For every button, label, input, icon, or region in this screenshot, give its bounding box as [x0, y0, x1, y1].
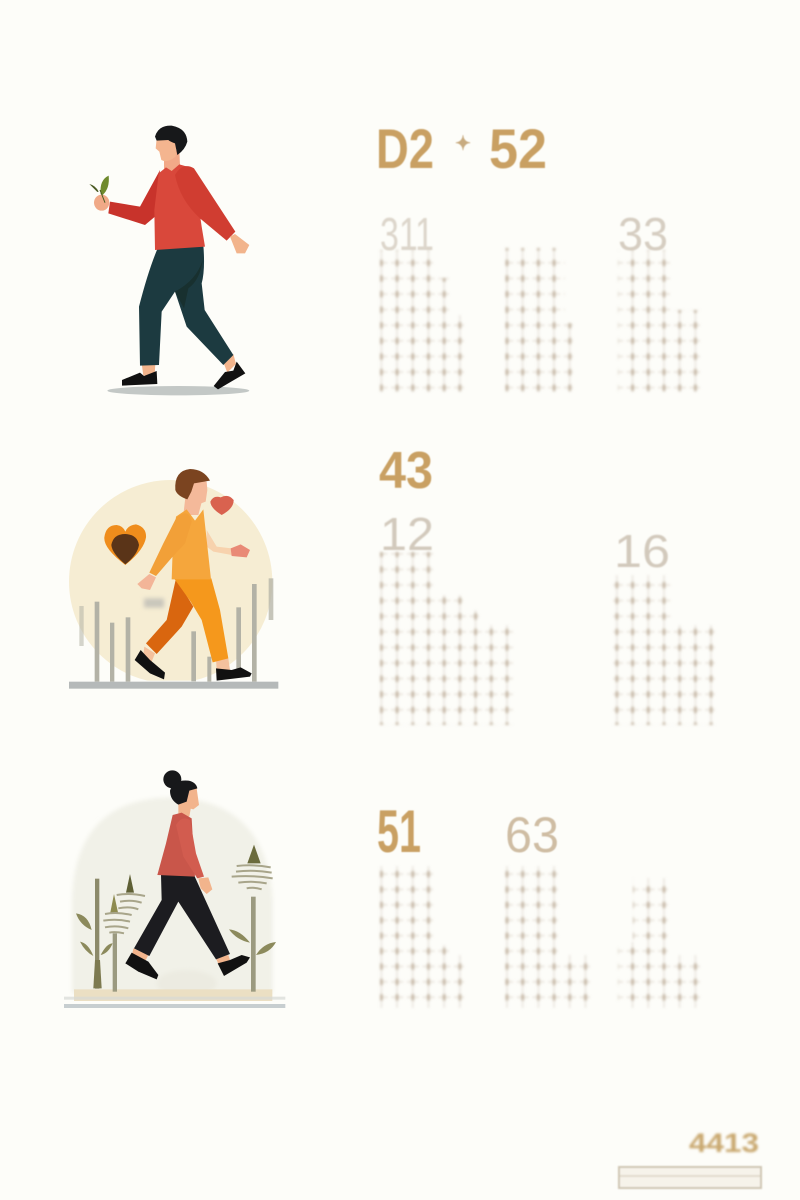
front arm: [175, 166, 235, 241]
near hand: [137, 574, 156, 590]
heading: D2 and 52: [376, 117, 547, 180]
sweater: [157, 813, 195, 877]
grid block one: [380, 250, 464, 392]
value D2: D2: [376, 117, 434, 180]
sleeve: [176, 818, 204, 878]
label: 311: 311: [380, 208, 434, 260]
left shoe: [125, 953, 158, 979]
near arm: [149, 513, 192, 576]
panel: top row grids: [380, 248, 700, 392]
icon: orange and brown heart: [104, 524, 146, 565]
back leg: [146, 578, 193, 654]
trouser shadow: [175, 260, 203, 308]
ankles: [142, 354, 236, 376]
fence posts: [79, 578, 273, 682]
ground line: [64, 1004, 285, 1008]
back arm: [108, 170, 160, 225]
right shoe: [218, 955, 250, 976]
sweater torso: [154, 164, 205, 250]
value 52: 52: [489, 117, 547, 180]
right hand: [230, 234, 249, 253]
grid block three: [618, 250, 700, 392]
hair bun: [163, 770, 181, 788]
far hand: [231, 544, 250, 557]
ground line upper: [64, 997, 285, 1000]
heading: 43: 43: [379, 442, 433, 500]
label: 33: 33: [618, 208, 668, 260]
hair: [155, 126, 187, 155]
ankles: [143, 647, 230, 671]
panel: bottom row grids: [380, 866, 700, 1008]
figure: man walking past heart: [69, 469, 278, 689]
left shoe: [135, 650, 165, 679]
grid block five: [613, 575, 715, 725]
left shoe: [122, 371, 157, 386]
heading: 51: 51: [377, 798, 421, 865]
ground shadow: [107, 386, 249, 395]
label: 12: 12: [380, 508, 434, 560]
face: [185, 480, 207, 505]
heading: 63: 63: [505, 807, 559, 863]
leaf: [89, 176, 109, 203]
figure: woman walking among plants: [64, 770, 285, 1008]
neck: [183, 492, 203, 515]
face: [156, 133, 177, 161]
dome backdrop: [72, 797, 273, 993]
grid block six: [380, 866, 464, 1008]
grid block eight: [618, 878, 700, 1008]
neck: [178, 802, 192, 817]
ground plate: [74, 989, 272, 1001]
icon: red heart near face: [210, 496, 234, 515]
label: 16: 16: [614, 525, 670, 577]
grid block seven: [505, 866, 590, 1008]
neck: [164, 150, 180, 173]
plant right: [229, 845, 276, 992]
grid block two: [505, 248, 573, 392]
footer bar: [619, 1167, 761, 1188]
hand: [198, 877, 212, 894]
right shoe: [216, 667, 252, 681]
hair: [170, 781, 197, 805]
ground bar: [69, 682, 278, 689]
face: [182, 787, 199, 809]
front leg: [174, 578, 228, 662]
figure: man walking with a leaf: [89, 126, 249, 395]
glow: [157, 970, 217, 997]
left hand: [94, 195, 109, 211]
far arm: [207, 530, 232, 555]
grid block four: [380, 552, 513, 725]
footer label: 4413: [689, 1128, 759, 1158]
trousers: [139, 245, 233, 366]
icon: small arrow glyph: ✦: [455, 133, 471, 155]
plants left: [76, 874, 145, 992]
right shoe: [214, 362, 245, 389]
ankles: [132, 948, 230, 964]
panel: middle row grids: [380, 552, 715, 725]
shirt: [172, 509, 211, 579]
blurred mark: [144, 598, 164, 608]
hair: [175, 469, 210, 499]
sun circle: [69, 480, 272, 683]
trousers: [134, 875, 230, 959]
